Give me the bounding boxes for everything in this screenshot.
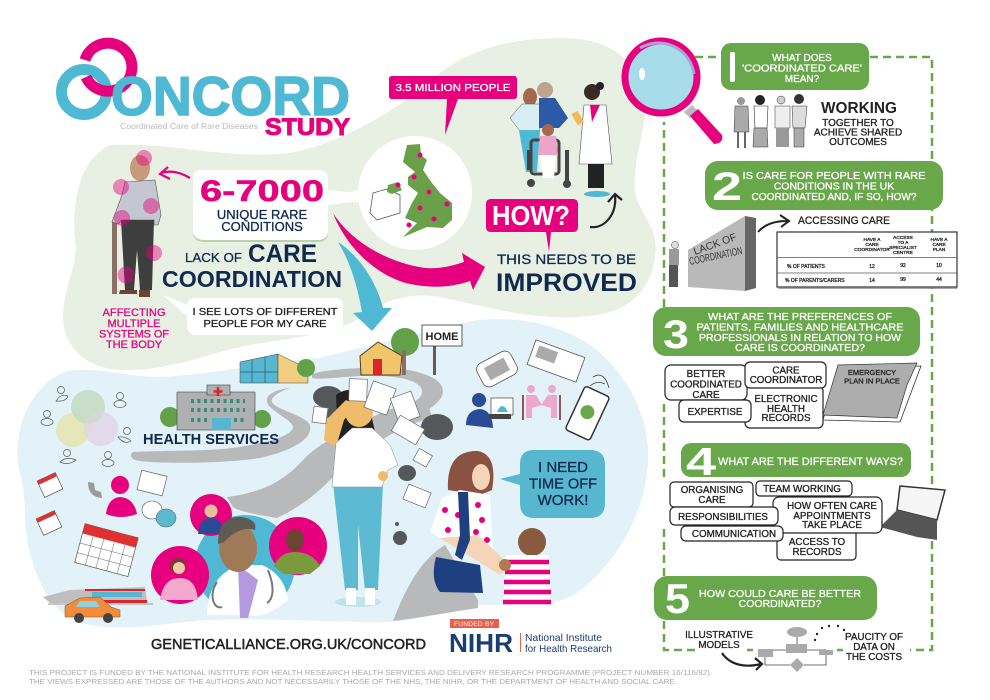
folder: emergency plan — [823, 363, 921, 422]
badge — [705, 161, 943, 210]
footer disclaimer: THE VIEWS EXPRESSED ARE THOSE OF THE AUTHORS AND NOT NECESSARILY THOSE OF THE NHS, THE NIHR, OR THE DEPARTMENT OF HEALTH AND SOCIAL CARE. — [29, 677, 677, 686]
question — [742, 53, 862, 85]
comms icons — [466, 340, 610, 441]
hair — [336, 390, 375, 445]
label: CONDITIONS — [221, 219, 303, 234]
windows — [191, 401, 245, 420]
wall: COORDINATION — [688, 245, 743, 268]
badge — [653, 307, 920, 356]
pink curved arrow — [333, 213, 485, 290]
shirt — [112, 180, 161, 225]
table headers: TO A — [898, 240, 909, 246]
speech bubble: time off work — [500, 450, 605, 518]
box: better coordinated care: CARE — [692, 390, 720, 401]
illustrative models: ILLUSTRATIVE — [685, 630, 753, 641]
step 4 — [670, 441, 945, 560]
Ireland — [370, 189, 400, 220]
question — [696, 311, 904, 354]
question: PROFESSIONALS IN RELATION TO HOW — [699, 332, 901, 344]
child head — [518, 528, 546, 556]
table rows: % OF PATIENTS — [787, 264, 826, 270]
speech bubble: time off work: TIME OFF — [529, 476, 597, 492]
box: care coordinator — [745, 362, 826, 388]
heading: this needs to be improved — [496, 251, 637, 297]
label — [217, 207, 307, 234]
caption: affecting multiple systems: AFFECTING — [102, 307, 166, 319]
working caption — [814, 118, 902, 148]
folder: emergency plan: EMERGENCY — [848, 368, 896, 377]
box: electronic health records: RECORDS — [762, 413, 811, 424]
table rows: 10 — [936, 263, 942, 269]
website url: GENETICALLIANCE.ORG.UK/CONCORD — [151, 636, 426, 653]
illustrative models: MODELS — [698, 640, 740, 651]
box: access to records: ACCESS TO — [789, 537, 846, 548]
question: WHAT DOES — [772, 53, 832, 64]
speech bubble: time off work: WORK! — [538, 492, 588, 509]
step 5 — [654, 575, 903, 672]
heading: this needs to be improved: IMPROVED — [496, 269, 637, 297]
heading: lack of care coordination: COORDINATION — [162, 266, 342, 292]
question: COORDINATED? — [739, 598, 821, 610]
funder logo: for Health Research — [525, 643, 612, 655]
nihr wordmark: NIHR — [449, 628, 513, 658]
blue curved arrow — [338, 242, 392, 331]
strap — [455, 492, 470, 560]
table rows: 44 — [936, 277, 942, 283]
callout: how: HOW? — [492, 200, 570, 231]
clinician — [584, 84, 600, 100]
face — [472, 464, 490, 490]
national institute: National Institute — [525, 632, 602, 644]
highlights — [113, 150, 162, 284]
question — [699, 588, 861, 610]
child in wheelchair — [531, 140, 559, 174]
box: organising care: ORGANISING — [681, 485, 743, 496]
hair — [448, 451, 493, 495]
logo rings — [62, 43, 132, 115]
table — [777, 232, 957, 288]
sign — [422, 325, 462, 346]
footer disclaimer: THIS PROJECT IS FUNDED BY THE NATIONAL INSTITUTE FOR HEALTH RESEARCH HEALTH SERVICES AND DELIVERY RESEARCH PROGRAMME (PROJECT NUMBER 16/116/82). — [29, 668, 712, 677]
table rows: % OF PARENTS/CARERS — [785, 278, 845, 284]
table headers: HAVE A — [931, 237, 948, 243]
head — [130, 155, 150, 181]
badge — [654, 576, 877, 620]
working: WORKING — [821, 100, 897, 117]
question — [742, 170, 926, 203]
badge — [721, 43, 869, 90]
illustrative models — [685, 630, 753, 651]
box: how often — [773, 497, 882, 533]
jeans — [333, 483, 383, 590]
speech bubble: different people — [163, 295, 343, 335]
doctors — [151, 494, 327, 618]
paucity of data: PAUCITY OF — [845, 632, 903, 643]
table rows: 99 — [900, 277, 906, 283]
table headers: CARE — [932, 242, 946, 248]
flow chart — [758, 627, 833, 672]
paucity of data: THE COSTS — [846, 652, 902, 663]
box: access to records — [777, 530, 856, 560]
question: PATIENTS, FAMILIES AND HEALTHCARE — [696, 322, 904, 334]
trees — [160, 407, 180, 427]
wall — [688, 216, 756, 291]
table headers: SPECIALIST — [889, 245, 917, 251]
calendars — [36, 473, 138, 577]
box: communication — [681, 526, 783, 541]
blue circle — [195, 515, 295, 615]
magnifying glass — [625, 41, 722, 144]
roads — [131, 368, 478, 621]
step 3 — [653, 307, 921, 428]
box: better coordinated care: BETTER — [687, 369, 725, 380]
background: pale blue blob — [18, 319, 648, 627]
main doctor — [207, 517, 288, 618]
pink circle: nurse — [190, 494, 232, 536]
table rows: 14 — [869, 278, 875, 284]
wall text: LACK OF — [692, 231, 738, 258]
bubble — [193, 172, 328, 242]
scattered papers — [312, 379, 432, 508]
dark stress clouds — [313, 386, 453, 545]
box: how often: HOW OFTEN CARE — [787, 501, 877, 512]
shirt — [332, 428, 398, 487]
numeral: 5 — [665, 575, 690, 622]
trousers — [121, 220, 154, 290]
laptop — [880, 486, 945, 540]
callout: 3.5 million people — [389, 76, 517, 135]
box: better coordinated care: COORDINATED — [670, 380, 742, 390]
heading: lack of care coordination: LACK OF — [185, 250, 242, 265]
table rows: 92 — [900, 263, 906, 269]
car — [65, 597, 120, 623]
funded by tag — [450, 619, 499, 628]
house — [360, 342, 402, 375]
Northern Ireland — [387, 182, 402, 194]
paucity of data — [845, 632, 903, 663]
folder: emergency plan: PLAN IN PLACE — [844, 376, 900, 386]
caption: affecting multiple systems — [99, 307, 169, 351]
table headers: COORDINATOR — [854, 247, 890, 253]
box: expertise: EXPERTISE — [688, 407, 743, 418]
person outlines — [41, 386, 131, 466]
box: expertise — [679, 400, 751, 422]
table headers: ACCESS — [893, 235, 913, 241]
large calendar — [75, 524, 138, 577]
table headers: CENTRE — [893, 250, 913, 256]
table rows — [785, 263, 942, 284]
caption: affecting multiple systems: SYSTEMS OF — [99, 328, 169, 340]
accessing care: ACCESSING CARE — [798, 215, 890, 227]
dashed border — [664, 57, 932, 650]
speech bubble: time off work: I NEED — [538, 459, 588, 476]
envelope bubble — [474, 349, 520, 389]
question: CARE IS COORDINATED? — [735, 342, 865, 354]
arrow to person — [160, 167, 190, 179]
stressed woman — [324, 390, 398, 607]
question: COORDINATED AND, IF SO, HOW? — [752, 191, 917, 203]
callout: how — [486, 199, 578, 252]
question: WHAT ARE THE PREFERENCES OF — [708, 311, 892, 323]
cane — [112, 222, 117, 294]
person with highlighted body systems — [112, 150, 162, 297]
box: organising care: CARE — [698, 495, 726, 506]
sign text: HOME — [426, 331, 458, 343]
table headers: HAVE A — [864, 237, 881, 243]
funder logo: FUNDED BY — [454, 621, 495, 628]
box: responsibilities — [670, 507, 778, 525]
caption: affecting multiple systems: MULTIPLE — [108, 318, 160, 330]
logo wordmark: ONCORD — [111, 65, 350, 127]
arrow to table — [758, 215, 789, 232]
box: how often: APPOINTMENTS — [793, 511, 871, 522]
box: communication: COMMUNICATION — [692, 529, 776, 540]
callout: 3.5 million people: 3.5 MILLION PEOPLE — [396, 82, 510, 94]
background: pale green blob — [63, 38, 656, 370]
box: team working — [756, 481, 852, 496]
badge — [681, 443, 911, 477]
box: how often: TAKE PLACE — [802, 520, 862, 531]
heading: lack of care coordination: CARE — [248, 240, 317, 268]
working caption: OUTCOMES — [829, 137, 887, 148]
four people illustration — [734, 94, 807, 148]
table headers — [854, 235, 948, 256]
health services label: HEALTH SERVICES — [143, 431, 279, 448]
person at laptop — [472, 393, 486, 407]
house and home sign — [360, 325, 462, 375]
box: responsibilities: RESPONSIBILITIES — [678, 512, 768, 523]
sign post — [433, 346, 436, 375]
question: MEAN? — [785, 74, 820, 85]
question: HOW COULD CARE BE BETTER — [699, 588, 861, 600]
numeral: 4 — [686, 441, 716, 484]
question: 'COORDINATED CARE' — [742, 64, 862, 74]
logo — [62, 43, 350, 141]
numeral — [730, 52, 735, 82]
child shirt — [503, 555, 551, 612]
working caption: TOGETHER TO — [822, 118, 894, 129]
question: IS CARE FOR PEOPLE WITH RARE — [742, 170, 926, 182]
handle — [684, 105, 698, 118]
shoes — [335, 597, 381, 607]
heading: lack of care coordination — [162, 240, 342, 292]
arrow to flow chart — [722, 653, 762, 670]
box: electronic health records — [745, 386, 823, 428]
caption: affecting multiple systems: THE BODY — [106, 339, 163, 351]
box: team working: TEAM WORKING — [763, 484, 841, 495]
UK map circle — [336, 136, 472, 250]
face and arm — [345, 397, 373, 427]
clinic building — [240, 354, 315, 383]
step 2 — [669, 161, 957, 291]
hospital — [160, 385, 271, 430]
woman — [523, 88, 537, 106]
box: access to records: RECORDS — [792, 547, 842, 558]
box: electronic health records: ELECTRONIC — [754, 394, 818, 405]
man at wall — [669, 242, 679, 287]
question: WHAT ARE THE DIFFERENT WAYS? — [718, 456, 903, 468]
black arrow up to people — [590, 194, 622, 227]
circle with pointer — [336, 190, 358, 203]
table headers: PLAN — [933, 247, 946, 253]
meeting — [526, 385, 557, 418]
logo tagline: Coordinated Care of Rare Diseases — [120, 121, 258, 131]
speech bubble: different people: I SEE LOTS OF DIFFERENT — [192, 306, 338, 318]
table headers: CARE — [865, 242, 879, 248]
numeral: 2 — [712, 165, 742, 209]
box: electronic health records: HEALTH — [767, 404, 805, 415]
question: CONDITIONS IN THE UK — [774, 180, 894, 192]
red cross — [214, 387, 222, 396]
Great Britain — [403, 144, 452, 237]
blouse — [430, 490, 493, 553]
label: UNIQUE RARE — [217, 207, 307, 222]
box: organising care — [670, 482, 753, 507]
table rows: 12 — [869, 264, 875, 270]
heading: this needs to be improved: THIS NEEDS TO BE — [497, 251, 636, 267]
letters — [527, 340, 585, 382]
box: care coordinator: CARE — [772, 366, 800, 376]
bag — [434, 557, 483, 593]
box: better coordinated care — [665, 365, 747, 401]
pink circle: man — [269, 517, 327, 575]
arm — [440, 535, 510, 575]
speech bubble: different people: PEOPLE FOR MY CARE — [204, 318, 326, 330]
contact icons — [88, 470, 176, 527]
number: 6-7000 — [200, 175, 324, 208]
footer disclaimer — [29, 668, 712, 686]
older man — [537, 82, 553, 98]
logo study: STUDY — [265, 114, 350, 141]
funder logo — [449, 619, 612, 658]
dotted arc — [814, 625, 845, 641]
family with clinician — [510, 82, 612, 197]
building — [177, 392, 255, 430]
step 1 — [721, 43, 902, 148]
map pins — [396, 152, 450, 228]
train — [43, 587, 153, 604]
paucity of data: DATA ON — [853, 642, 895, 653]
callout: 6-7000 conditions — [193, 170, 392, 242]
mother and child — [430, 451, 551, 612]
box: care coordinator: COORDINATOR — [750, 375, 822, 386]
tree — [391, 328, 419, 356]
shoes — [119, 290, 150, 297]
people network circles — [41, 386, 131, 466]
lens — [625, 41, 697, 113]
pink circle: woman — [151, 546, 209, 604]
smartphone — [565, 386, 610, 441]
working caption: ACHIEVE SHARED — [814, 128, 902, 138]
numeral: 3 — [663, 313, 689, 357]
